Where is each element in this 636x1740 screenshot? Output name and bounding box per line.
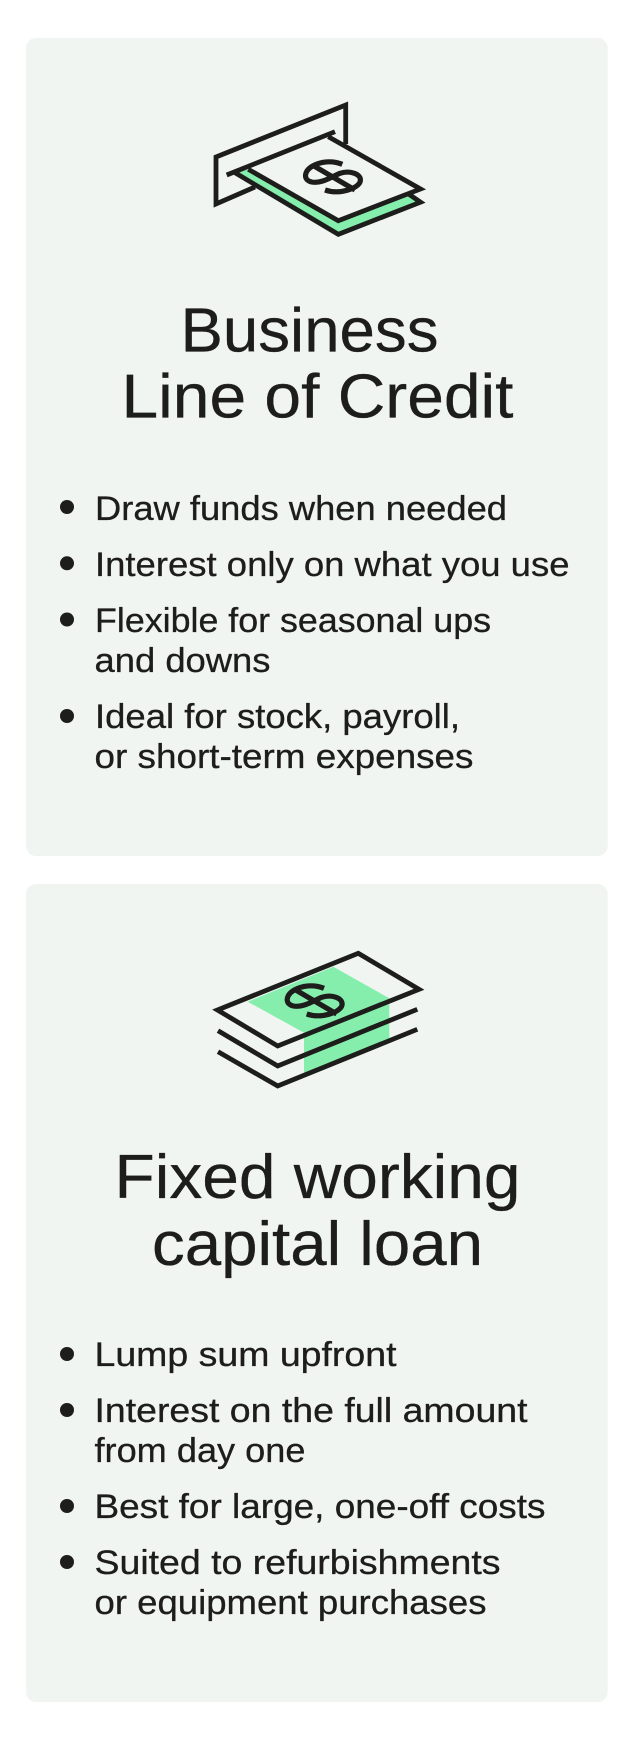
panel: business line of credit — [26, 38, 608, 856]
list: working capital loan features: Best for large, one-off costs — [94, 1488, 546, 1526]
list: line of credit features: Ideal for stock, payroll, — [95, 698, 460, 736]
list: working capital loan features: Suited to refurbishments — [94, 1544, 500, 1582]
panel: fixed working capital loan — [26, 884, 608, 1702]
list: line of credit features — [60, 490, 570, 776]
icon: stack of banknotes — [218, 953, 419, 1086]
heading: fixed working capital loan — [114, 1143, 520, 1279]
list: line of credit features: or short-term expenses — [94, 738, 474, 776]
icon: banknote leaving a slot — [216, 105, 420, 234]
list: working capital loan features: Interest on the full amount — [94, 1392, 528, 1430]
heading: fixed working capital loan: Fixed working — [114, 1143, 520, 1212]
list: working capital loan features: or equipment purchases — [94, 1584, 486, 1622]
list: working capital loan features — [60, 1336, 546, 1622]
list: working capital loan features: from day one — [94, 1432, 306, 1470]
list: working capital loan features: Lump sum upfront — [94, 1336, 397, 1374]
heading: fixed working capital loan: capital loan — [152, 1210, 483, 1279]
list: line of credit features: Interest only on what you use — [95, 546, 570, 584]
heading: business line of credit: Line of Credit — [122, 363, 514, 432]
heading: business line of credit: Business — [180, 296, 438, 366]
heading: business line of credit — [122, 296, 514, 432]
list: line of credit features: Flexible for seasonal ups — [95, 602, 491, 640]
list: line of credit features: and downs — [94, 642, 270, 680]
list: line of credit features: Draw funds when needed — [95, 490, 507, 528]
